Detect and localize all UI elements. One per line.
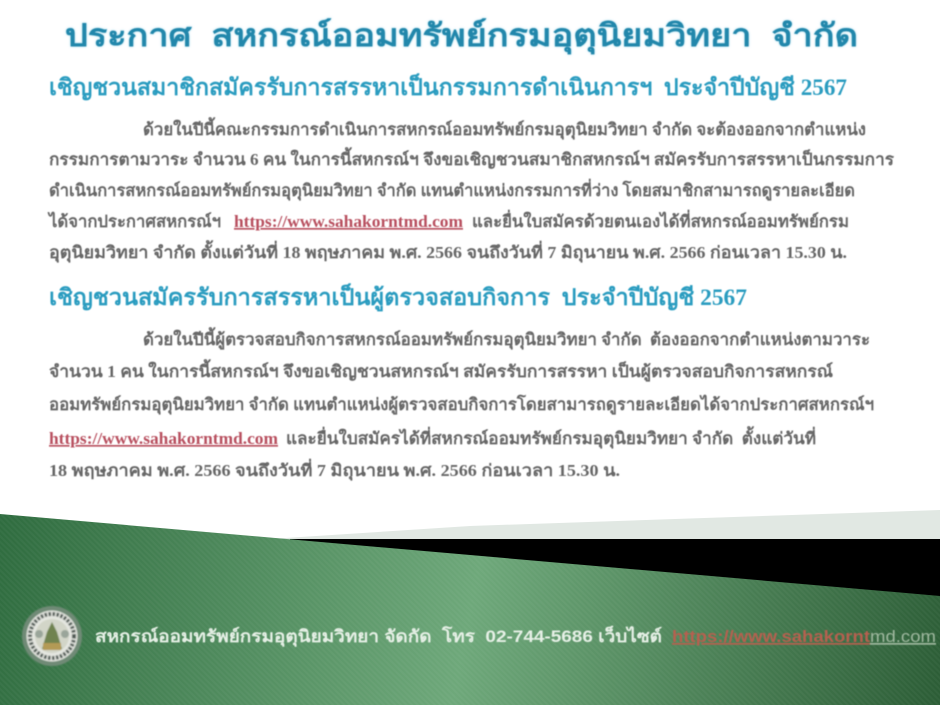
text block: auditor details: 18 พฤษภาคม พ.ศ. 2566 จนถึงวันที่ 7 มิถุนายน พ.ศ. 2566 ก่อนเวลา 15.30 น. bbox=[49, 458, 620, 481]
text block: committee details: และยื่นใบสมัครด้วยตนเองได้ที่สหกรณ์ออมทรัพย์กรม bbox=[472, 209, 849, 231]
footer link: https://www.sahakornt bbox=[672, 627, 870, 646]
footer band bbox=[0, 510, 940, 705]
black band bbox=[290, 539, 940, 600]
light sliver bbox=[270, 510, 940, 539]
text block: auditor details: ออมทรัพย์กรมอุตุนิยมวิทยา จำกัด แทนตำแหน่งผู้ตรวจสอบกิจการโดยสามารถดูรายละเอียดได้จากประกาศสหกรณ์ฯ bbox=[49, 394, 874, 416]
text block: auditor details: https://www.sahakorntmd.com bbox=[49, 429, 278, 448]
heading: auditor invitation: เชิญชวนสมัครรับการสรรหาเป็นผู้ตรวจสอบกิจการ ประจำปีบัญชี 2567 bbox=[49, 282, 747, 312]
panel: auditor invitation bbox=[49, 282, 874, 481]
text block: auditor details: และยื่นใบสมัครได้ที่สหกรณ์ออมทรัพย์กรมอุตุนิยมวิทยา จำกัด ตั้งแต่วันที่ bbox=[286, 426, 816, 449]
text block: committee details: ได้จากประกาศสหกรณ์ฯ bbox=[47, 211, 221, 231]
footer contact text bbox=[95, 624, 936, 647]
footer link bbox=[672, 627, 936, 646]
footer contact text: สหกรณ์ออมทรัพย์กรมอุตุนิยมวิทยา จัดกัด โทร 02-744-5686 เว็บไซต์ bbox=[95, 624, 662, 647]
text block: committee details: อุตุนิยมวิทยา จำกัด ตั้งแต่วันที่ 18 พฤษภาคม พ.ศ. 2566 จนถึงวันที่ 7 มิถุนายน พ.ศ. 2566 ก่อนเวลา 15.30 น. bbox=[49, 240, 847, 263]
title: ประกาศ สหกรณ์ออมทรัพย์กรมอุตุนิยมวิทยา จำกัด bbox=[65, 18, 858, 55]
heading: committee invitation: เชิญชวนสมาชิกสมัครรับการสรรหาเป็นกรรมการดำเนินการฯ ประจำปีบัญชี 2567 bbox=[49, 72, 847, 101]
text block: committee details: กรรมการตามวาระ จำนวน 6 คน ในการนี้สหกรณ์ฯ จึงขอเชิญชวนสมาชิกสหกรณ์ฯ สมัครรับการสรรหาเป็นกรรมการ bbox=[49, 147, 894, 170]
text block: auditor details bbox=[49, 327, 874, 481]
text block: auditor details: จำนวน 1 คน ในการนี้สหกรณ์ฯ จึงขอเชิญชวนสหกรณ์ฯ สมัครรับการสรรหา เป็นผู้ตรวจสอบกิจการสหกรณ์ bbox=[49, 359, 833, 383]
text block: auditor details: ด้วยในปีนี้ผู้ตรวจสอบกิจการสหกรณ์ออมทรัพย์กรมอุตุนิยมวิทยา จำกัด ต้องออกจากตำแหน่งตามวาระ bbox=[143, 327, 870, 351]
text block: committee details: ดำเนินการสหกรณ์ออมทรัพย์กรมอุตุนิยมวิทยา จำกัด แทนตำแหน่งกรรมการที่ว่าง โดยสมาชิกสามารถดูรายละเอียด bbox=[49, 178, 855, 202]
text block: committee details: https://www.sahakorntmd.com bbox=[234, 212, 463, 231]
icon: cooperative seal bbox=[22, 606, 82, 666]
text block: committee details: ด้วยในปีนี้คณะกรรมการดำเนินการสหกรณ์ออมทรัพย์กรมอุตุนิยมวิทยา จำกัด จะต้องออกจากตำแหน่ง bbox=[143, 117, 866, 140]
panel: committee invitation bbox=[47, 72, 894, 263]
text block: committee details bbox=[47, 117, 894, 263]
footer link: md.com bbox=[870, 627, 936, 646]
green panel bbox=[0, 514, 940, 705]
stripe overlay bbox=[0, 514, 940, 705]
